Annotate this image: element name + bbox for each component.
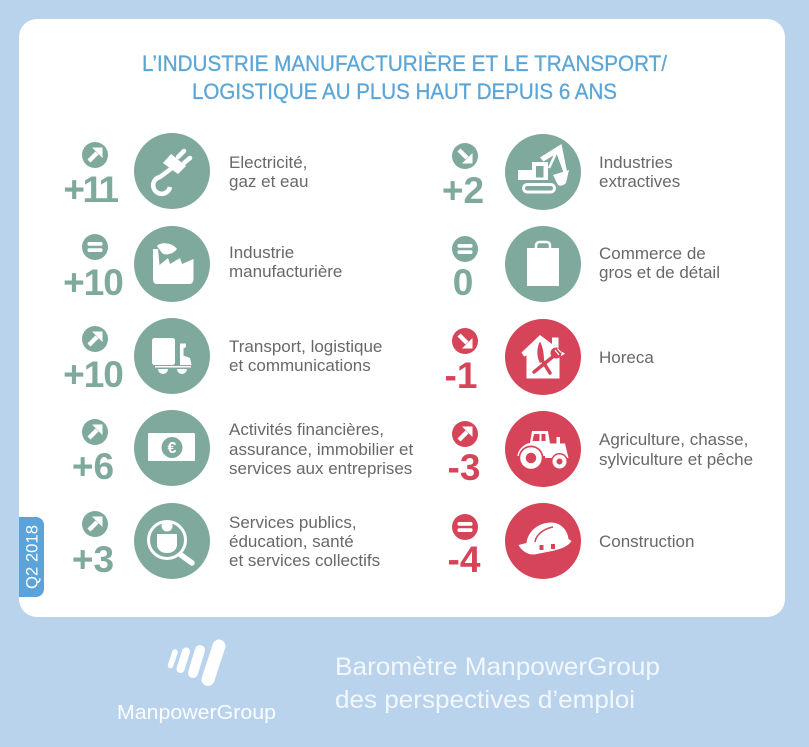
label: Services publics,: [229, 513, 357, 532]
title: LOGISTIQUE AU PLUS HAUT DEPUIS 6 ANS: [192, 79, 617, 104]
icon: factory: [134, 226, 210, 302]
trend badge equal: [452, 514, 478, 540]
row: électricité: [63, 133, 308, 210]
white panel: [19, 19, 785, 617]
label: Industrie: [229, 243, 294, 262]
quarter tab: Q2 2018: [22, 525, 42, 589]
value +2: +2: [442, 170, 484, 211]
value 0: 0: [453, 262, 473, 303]
trend badge up: [82, 419, 108, 445]
label: Commerce de: [599, 244, 706, 263]
value +3: +3: [72, 539, 114, 580]
row: industrie manufacturière: [63, 226, 342, 303]
icon: banknote: €: [168, 440, 177, 457]
trend badge up: [82, 326, 108, 352]
label: Electricité,: [229, 153, 307, 172]
label: manufacturière: [229, 262, 342, 281]
logo wordmark: ManpowerGroup: [117, 702, 276, 724]
label: éducation, santé: [229, 532, 354, 551]
label: gaz et eau: [229, 172, 308, 191]
label: Industries: [599, 153, 673, 172]
icon: shopping bag: [505, 226, 581, 302]
quarter tab: [19, 517, 44, 597]
icon: tractor: [505, 411, 581, 487]
icon: hard hat: [505, 503, 581, 579]
logo bars: [170, 646, 219, 680]
value +11: +11: [63, 169, 119, 210]
label: assurance, immobilier et: [229, 440, 414, 459]
trend badge up: [82, 511, 108, 537]
footer title: [335, 653, 660, 714]
trend badge up: [82, 142, 108, 168]
footer title: Baromètre ManpowerGroup: [335, 653, 660, 681]
trend badge up: [452, 421, 478, 447]
icon: magnifier person: [134, 503, 210, 579]
trend badge down: [452, 328, 478, 354]
label: Agriculture, chasse,: [599, 430, 748, 449]
label: et services collectifs: [229, 551, 380, 570]
row: horeca: [445, 319, 654, 396]
icon: excavator: [505, 134, 581, 210]
label: sylviculture et pêche: [599, 450, 753, 469]
label: services aux entreprises: [229, 459, 412, 478]
icon: truck: [134, 318, 210, 394]
row: construction: [448, 503, 694, 580]
row: finance: [72, 410, 414, 487]
value -4: -4: [448, 539, 481, 580]
trend badge equal: [452, 236, 478, 262]
label: Transport, logistique: [229, 337, 382, 356]
row: transport: [63, 318, 382, 395]
label: extractives: [599, 172, 680, 191]
value +10: +10: [63, 354, 123, 395]
value -3: -3: [448, 447, 480, 488]
label: Activités financières,: [229, 420, 384, 439]
value -1: -1: [445, 355, 477, 396]
value +10: +10: [63, 262, 123, 303]
icon: plug: [134, 133, 210, 209]
trend badge down: [452, 143, 478, 169]
icon: banknote: [134, 410, 210, 486]
value +6: +6: [72, 446, 114, 487]
footer title: des perspectives d’emploi: [335, 686, 635, 714]
label: Construction: [599, 532, 694, 551]
title: L’INDUSTRIE MANUFACTURIÈRE ET LE TRANSPORT/: [142, 51, 668, 76]
label: Horeca: [599, 348, 654, 367]
title: [142, 51, 668, 104]
row: commerce: [452, 226, 720, 303]
label: gros et de détail: [599, 263, 720, 282]
icon: house with cutlery: [505, 319, 581, 395]
logo: ManpowerGroup: [117, 646, 276, 724]
trend badge equal: [82, 234, 108, 260]
label: et communications: [229, 356, 371, 375]
row: agriculture: [448, 411, 753, 488]
row: industries extractives: [442, 134, 680, 211]
row: services publics: [72, 503, 380, 580]
